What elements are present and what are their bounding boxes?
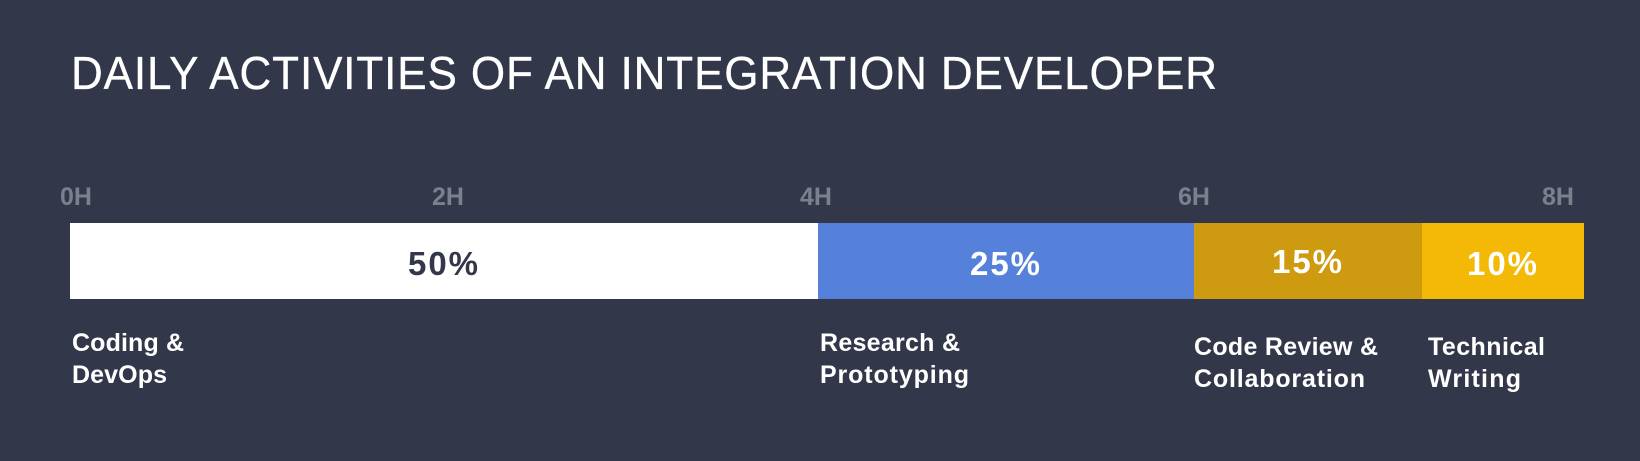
label: technical writing: [1428, 333, 1545, 393]
tick: 8H: 8H: [1542, 183, 1574, 211]
hour axis labels: [60, 183, 1574, 211]
tick: 6H: 6H: [1178, 183, 1210, 211]
label: code review and collaboration: Collaboration: [1194, 365, 1365, 393]
segment: research and prototyping 25%: [818, 223, 1194, 299]
segment: code review and collaboration 15%: [1194, 223, 1422, 299]
tick: 0H: 0H: [60, 183, 92, 211]
label: code review and collaboration: Code Review &: [1194, 333, 1378, 361]
label: coding and devops: [72, 329, 184, 389]
label: technical writing: Technical: [1428, 333, 1545, 361]
segment: technical writing 10%: [1422, 223, 1584, 299]
segment: coding and devops 50%: 50%: [408, 245, 478, 282]
segment: code review and collaboration 15%: 15%: [1272, 243, 1342, 280]
label: technical writing: Writing: [1428, 365, 1521, 393]
segment: research and prototyping 25%: 25%: [970, 245, 1040, 282]
label: coding and devops: Coding &: [72, 329, 184, 357]
segment: coding and devops 50%: [70, 223, 818, 299]
stacked bar chart: [70, 223, 1584, 299]
title: DAILY ACTIVITIES OF AN INTEGRATION DEVELOPER: [71, 47, 1217, 99]
segment: technical writing 10%: 10%: [1467, 245, 1537, 282]
label: research and prototyping: Prototyping: [820, 361, 969, 389]
label: research and prototyping: [820, 329, 969, 389]
label: research and prototyping: Research &: [820, 329, 960, 357]
label: code review and collaboration: [1194, 333, 1378, 393]
tick: 4H: 4H: [800, 183, 832, 211]
tick: 2H: 2H: [432, 183, 464, 211]
label: coding and devops: DevOps: [72, 361, 167, 389]
